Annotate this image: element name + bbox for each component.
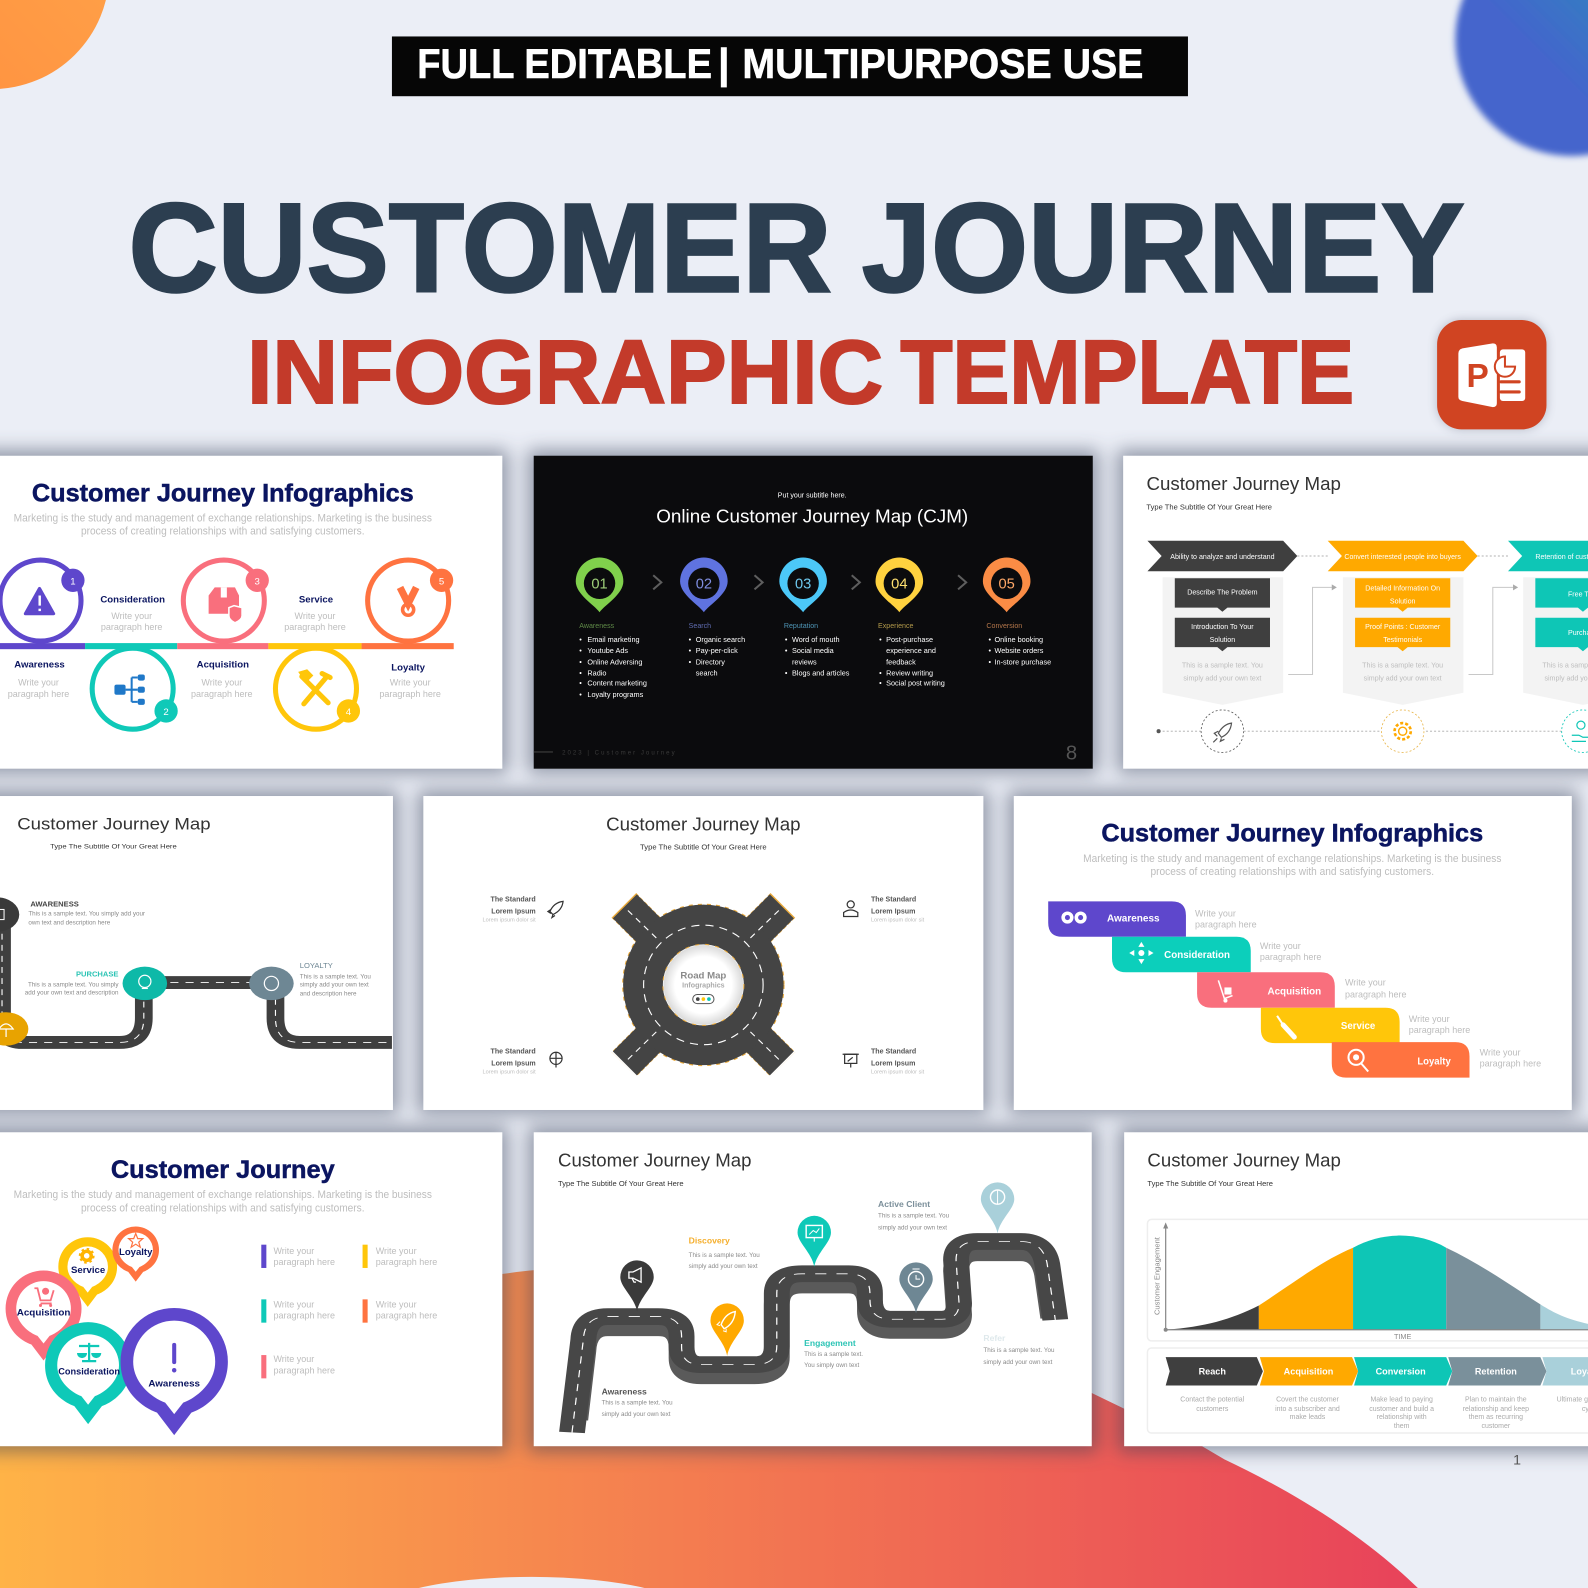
- panel: engagement curve: customer and build a: [1369, 1406, 1434, 1413]
- panel: customer journey infographics circles: 3: [255, 576, 260, 587]
- panel: online customer journey map: Radio: [587, 669, 606, 678]
- step: consideration: Consideration: [1164, 950, 1230, 961]
- panel: road map roundabout: The Standard: [491, 895, 536, 903]
- banner: [392, 36, 1188, 96]
- process arrows: Reach: [1199, 1366, 1226, 1376]
- panel: customer journey staircase: paragraph here: [1195, 920, 1257, 930]
- panel: winding road map: [534, 1132, 1092, 1446]
- panel: road map roundabout: The Standard: [871, 1047, 916, 1055]
- step: acquisition: Acquisition: [1267, 987, 1321, 998]
- road: [2, 912, 392, 1042]
- chevron: teal: [1508, 541, 1588, 571]
- panel: online customer journey map: [534, 456, 1093, 769]
- panel: engagement curve: relationship with: [1377, 1414, 1427, 1421]
- panel: customer journey pins: paragraph here: [273, 1365, 335, 1375]
- panel: customer journey pins: Write your: [273, 1246, 314, 1256]
- panel: engagement curve: Make lead to paying: [1370, 1397, 1433, 1404]
- panel: customer journey staircase: Write your: [1260, 941, 1301, 951]
- panel: customer journey map chevrons: Convert interested people into buyers: [1344, 553, 1461, 561]
- panel: customer journey pins: paragraph here: [273, 1257, 335, 1267]
- panel: winding road map: This is a sample text. You: [689, 1252, 760, 1259]
- panel: road map roundabout: Lorem Ipsum: [491, 1059, 536, 1067]
- pin: service: [58, 1237, 117, 1307]
- pin: acquisition: Acquisition: [17, 1308, 71, 1319]
- panel: online customer journey map: •: [579, 690, 582, 699]
- panel: customer journey staircase: Customer Journey Infographics: [1101, 820, 1483, 848]
- panel: engagement curve: Type The Subtitle Of Your Great Here: [1147, 1180, 1273, 1188]
- step: service: [1261, 1008, 1400, 1043]
- milestone nodes: [0, 897, 294, 1046]
- panel: winding road map: Active Client: [878, 1199, 930, 1209]
- panel: road with milestones: own text and description here: [28, 920, 111, 927]
- panel: road with milestones: [0, 796, 393, 1110]
- panel: engagement curve: make leads: [1290, 1414, 1326, 1421]
- pin: awareness: [121, 1308, 228, 1435]
- panel: winding road map: Discovery: [689, 1236, 730, 1246]
- panel: road map roundabout: The Standard: [491, 1047, 536, 1055]
- icon: powerpoint: P: [1466, 358, 1489, 395]
- pins: 02: [696, 576, 712, 592]
- icon: tools: [300, 670, 330, 704]
- road: [572, 1242, 1055, 1432]
- panel: road map roundabout: Lorem Ipsum: [871, 1059, 915, 1067]
- panel: customer journey infographics circles: Write your: [18, 678, 59, 688]
- panel: online customer journey map: reviews: [792, 657, 817, 666]
- title: customer journey: JOURNEY: [862, 177, 1464, 319]
- panel: online customer journey map: Loyalty programs: [587, 690, 644, 699]
- panel: online customer journey map: •: [785, 646, 788, 655]
- panel: customer journey map chevrons: This is a sample text. You: [1182, 661, 1263, 669]
- panel: road with milestones: Customer Journey Map: [17, 814, 211, 833]
- panel: road map roundabout: [423, 796, 983, 1110]
- panel: road map roundabout: Lorem ipsum dolor sit: [483, 1070, 536, 1076]
- pins: [620, 1182, 1014, 1356]
- title: infographic template: [247, 322, 1354, 423]
- panel: customer journey staircase: [1014, 796, 1572, 1110]
- panel: road with milestones: AWARENESS: [30, 899, 79, 908]
- pins: 05: [999, 576, 1015, 592]
- panel: road map roundabout: Road Map: [680, 970, 726, 981]
- panel: customer journey infographics circles: 2: [163, 707, 169, 718]
- panel: winding road map: This is a sample text.: [804, 1351, 863, 1358]
- panel: online customer journey map: •: [579, 635, 582, 644]
- panel: online customer journey map: experience and: [886, 646, 936, 655]
- panel: online customer journey map: 2023 | Customer Journey: [562, 751, 677, 757]
- panel: road map roundabout: Infographics: [682, 981, 725, 989]
- panel: customer journey infographics circles: paragraph here: [101, 622, 162, 632]
- panel: road with milestones: PURCHASE: [76, 969, 118, 978]
- icon: rocket: [548, 901, 563, 918]
- arrows: [653, 575, 966, 589]
- panel: online customer journey map: Pay-per-click: [696, 646, 738, 655]
- panel: winding road map: This is a sample text. You: [602, 1400, 673, 1407]
- pins: 04: [891, 576, 907, 592]
- panel: online customer journey map: Put your subtitle here.: [778, 491, 847, 499]
- process arrows: Acquisition: [1284, 1366, 1333, 1376]
- pin: awareness: Awareness: [148, 1378, 200, 1389]
- panel: online customer journey map: •: [988, 657, 991, 666]
- panel: customer journey map chevrons: simply add your own text: [1183, 675, 1261, 683]
- panel: customer journey map chevrons: Detailed Information On: [1365, 584, 1440, 592]
- panel: customer journey pins: paragraph here: [376, 1257, 437, 1267]
- panel: online customer journey map: Directory: [696, 657, 725, 666]
- panel: engagement curve: customer: [1482, 1423, 1511, 1430]
- pin: consideration: Consideration: [58, 1366, 120, 1376]
- panel: online customer journey map: •: [879, 679, 882, 688]
- panel: online customer journey map: •: [579, 669, 582, 678]
- page number: 1: [1513, 1452, 1521, 1468]
- panel: engagement curve: Plan to maintain the: [1465, 1397, 1527, 1404]
- panel: customer journey map chevrons: This is a sample text. You: [1362, 661, 1443, 669]
- panel: road map roundabout: Lorem Ipsum: [871, 908, 915, 916]
- panel: customer journey infographics circles: paragraph here: [8, 689, 69, 699]
- panel: customer journey infographics circles: [0, 456, 502, 769]
- title: customer journey: CUSTOMER: [129, 177, 831, 319]
- panel: online customer journey map: Website orders: [995, 646, 1044, 655]
- step: awareness: [1048, 901, 1186, 937]
- panel: customer journey staircase: paragraph here: [1345, 990, 1406, 1000]
- panel: customer journey infographics circles: 1: [70, 576, 76, 587]
- panel: customer journey infographics circles: Customer Journey Infographics: [32, 479, 414, 507]
- step: acquisition: [1197, 972, 1335, 1008]
- panel: online customer journey map: Experience: [878, 622, 914, 630]
- panel: winding road map: Awareness: [602, 1387, 647, 1397]
- panel: engagement curve: Customer Journey Map: [1147, 1151, 1341, 1171]
- panel: customer journey infographics circles: paragraph here: [379, 689, 441, 699]
- panel: customer journey pins: Write your: [376, 1246, 417, 1256]
- panel: online customer journey map: •: [579, 679, 582, 688]
- panel: online customer journey map: •: [879, 669, 882, 678]
- icon: package: [209, 587, 242, 623]
- panel: online customer journey map: Youtube Ads: [587, 646, 628, 655]
- panel: customer journey infographics circles: Write your: [390, 678, 431, 688]
- pin: service: Service: [71, 1265, 106, 1276]
- panel: customer journey infographics circles: paragraph here: [284, 622, 346, 632]
- panel: online customer journey map: •: [988, 646, 991, 655]
- panel: customer journey infographics circles: paragraph here: [191, 689, 253, 699]
- panel: online customer journey map: •: [689, 646, 692, 655]
- panel: online customer journey map: Content marketing: [587, 679, 647, 688]
- panel: customer journey staircase: process of creating relationships with and satisfying customers.: [1150, 866, 1434, 878]
- step: loyalty: Loyalty: [1417, 1056, 1451, 1067]
- panel: customer journey staircase: Write your: [1195, 909, 1236, 919]
- panel: customer journey pins: Write your: [376, 1299, 417, 1309]
- panel: road with milestones: This is a sample text. You simply: [28, 981, 119, 988]
- panel: winding road map: Refer: [983, 1333, 1006, 1343]
- panel: road map roundabout: Lorem ipsum dolor sit: [871, 918, 925, 924]
- panel: customer journey pins: paragraph here: [273, 1311, 335, 1321]
- panel: customer journey pins: paragraph here: [376, 1311, 437, 1321]
- panel: engagement curve: them: [1394, 1423, 1410, 1430]
- decoration: bottom gradient wave: [0, 1266, 1418, 1588]
- banner: MULTIPURPOSE USE: [742, 40, 1143, 87]
- panel: online customer journey map: Online Customer Journey Map (CJM): [656, 506, 968, 527]
- icon: medal: [400, 587, 416, 615]
- panel: customer journey infographics circles: 4: [346, 707, 352, 718]
- icon: rocket: [1213, 723, 1232, 742]
- icon: presentation: [843, 1054, 859, 1067]
- panel: online customer journey map: search: [696, 669, 718, 678]
- panel: winding road map: simply add your own text: [689, 1263, 758, 1270]
- bell curve chart: [1153, 1222, 1588, 1341]
- panel: customer journey staircase: Write your: [1409, 1014, 1450, 1024]
- panel: engagement curve: into a subscriber and: [1275, 1406, 1340, 1413]
- panel: customer journey pins: process of creating relationships with and satisfying customers.: [81, 1202, 365, 1214]
- panel: online customer journey map: Search: [689, 622, 711, 630]
- panel: engagement curve: customers: [1196, 1406, 1229, 1413]
- panel: road map roundabout: Lorem Ipsum: [491, 908, 536, 916]
- panel: winding road map: simply add your own text: [602, 1411, 671, 1418]
- panel: customer journey infographics circles: Service: [299, 595, 334, 606]
- panel: customer journey map chevrons: Introduction To Your: [1191, 623, 1254, 631]
- panel: online customer journey map: •: [785, 669, 788, 678]
- icon: powerpoint: [1437, 320, 1546, 429]
- pin: loyalty: [112, 1226, 159, 1282]
- chevron: orange: [1328, 541, 1478, 571]
- panel: engagement curve: Contact the potential: [1180, 1397, 1245, 1404]
- panel: road map roundabout: The Standard: [871, 895, 916, 903]
- step: consideration: [1112, 937, 1251, 972]
- banner: |: [718, 40, 730, 87]
- panel: customer journey pins: Write your: [273, 1299, 314, 1309]
- panel: online customer journey map: •: [579, 657, 582, 666]
- icon: hand with coin: [1572, 721, 1588, 741]
- panel: online customer journey map: Social media: [792, 646, 835, 655]
- panel: customer journey map chevrons: Customer Journey Map: [1146, 474, 1341, 494]
- icon: person: [844, 901, 858, 917]
- icon: gear: [1395, 723, 1411, 739]
- step: service: Service: [1341, 1021, 1376, 1032]
- icon: warning triangle: [25, 588, 54, 614]
- panel: road with milestones: add your own text and description: [25, 990, 119, 997]
- panel: online customer journey map: •: [879, 635, 882, 644]
- panel: customer journey map chevrons: Proof Points : Customer: [1365, 623, 1441, 631]
- panel: road map roundabout: Lorem ipsum dolor sit: [871, 1070, 925, 1076]
- step: awareness: Awareness: [1107, 914, 1160, 925]
- panel: customer journey infographics circles: Write your: [201, 678, 242, 688]
- panel: customer journey staircase: paragraph here: [1480, 1058, 1541, 1068]
- panel: road with milestones: This is a sample text. You: [300, 973, 371, 980]
- process arrows: Retention: [1475, 1366, 1517, 1376]
- panel: online customer journey map: Word of mouth: [792, 635, 840, 644]
- decoration: orange corner circle: [0, 0, 109, 89]
- chevron: dark: [1147, 541, 1297, 571]
- panel: customer journey infographics circles: Write your: [111, 611, 152, 621]
- panel: customer journey pins: Customer Journey: [111, 1156, 335, 1184]
- panel: winding road map: Engagement: [804, 1338, 856, 1348]
- panel: customer journey pins: Marketing is the study and management of exchange relationships. Marketing is the business: [14, 1189, 432, 1201]
- pins: [576, 558, 1030, 612]
- panel: customer journey staircase: Marketing is the study and management of exchange relationships. Marketing is the business: [1083, 853, 1501, 865]
- panel: road with milestones: and description here: [300, 991, 357, 998]
- panel: online customer journey map: Post-purchase: [886, 635, 933, 644]
- panel: customer journey staircase: paragraph here: [1409, 1025, 1470, 1035]
- panel: online customer journey map: 8: [1066, 743, 1077, 765]
- panel: customer journey pins: Write your: [273, 1354, 314, 1364]
- panel: customer journey map chevrons: Ability to analyze and understand: [1170, 553, 1275, 561]
- roundabout: [623, 904, 784, 1065]
- panel: online customer journey map: In-store purchase: [995, 657, 1051, 666]
- panel: customer journey infographics circles: Marketing is the study and management of exchange relationships. Marketing is the business: [14, 513, 432, 525]
- panel: engagement curve: Covert the customer: [1276, 1397, 1340, 1404]
- panel: customer journey staircase: Write your: [1345, 977, 1386, 987]
- panel: online customer journey map: •: [988, 635, 991, 644]
- panel: customer journey infographics circles: Awareness: [14, 659, 65, 670]
- panel: online customer journey map: Email marketing: [587, 635, 640, 644]
- panel: road with milestones: Type The Subtitle Of Your Great Here: [50, 844, 177, 851]
- panel: customer journey map chevrons: Describe The Problem: [1187, 588, 1258, 596]
- bell curve chart: Customer Engagement: [1153, 1236, 1162, 1315]
- panel: online customer journey map: •: [689, 657, 692, 666]
- decoration: blue blurred corner circle: [1455, 0, 1588, 156]
- title: infographic template: INFOGRAPHIC: [247, 322, 883, 423]
- panel: customer journey map chevrons: Solution: [1210, 636, 1235, 644]
- panel: customer journey map chevrons: Type The Subtitle Of Your Great Here: [1146, 503, 1272, 511]
- panel: customer journey pins: [0, 1132, 502, 1446]
- process arrows: [1166, 1357, 1588, 1385]
- title: customer journey: [129, 177, 1464, 319]
- title: infographic template: TEMPLATE: [900, 322, 1354, 423]
- panel: winding road map: This is a sample text. You: [983, 1347, 1055, 1354]
- panel: customer journey map chevrons: simply add your own text: [1364, 675, 1442, 683]
- panel: online customer journey map: Online booking: [995, 635, 1043, 644]
- icon: traffic light: [693, 995, 714, 1004]
- pin: consideration: [45, 1322, 131, 1424]
- panel: online customer journey map: •: [689, 635, 692, 644]
- process arrows: Conversion: [1376, 1366, 1426, 1376]
- pin: acquisition: [6, 1271, 82, 1361]
- panel: online customer journey map: Organic search: [696, 635, 745, 644]
- panel: winding road map: simply add your own text: [983, 1359, 1053, 1366]
- panel: online customer journey map: Online Adversing: [587, 657, 642, 666]
- panel: online customer journey map: Review writing: [886, 669, 933, 678]
- panel: customer journey infographics circles: Loyalty: [391, 662, 426, 673]
- panel: online customer journey map: Awareness: [579, 622, 615, 630]
- panel: online customer journey map: Social post writing: [886, 679, 945, 688]
- panel: customer journey infographics circles: Consideration: [100, 595, 165, 606]
- panel: engagement curve: relationship and keep: [1463, 1406, 1529, 1413]
- panel: customer journey map chevrons: Testimonials: [1383, 636, 1423, 644]
- panel: customer journey infographics circles: Write your: [295, 611, 335, 621]
- panel: online customer journey map: Reputation: [784, 622, 818, 630]
- panel: winding road map: simply add your own text: [878, 1224, 947, 1231]
- panel: online customer journey map: •: [785, 635, 788, 644]
- panel: road with milestones: simply add your own text: [300, 981, 369, 988]
- pins: 03: [795, 576, 811, 592]
- panel: winding road map: You simply own text: [804, 1362, 860, 1369]
- step: loyalty: [1332, 1042, 1470, 1078]
- panel: winding road map: This is a sample text. You: [878, 1212, 950, 1219]
- panel: customer journey staircase: Write your: [1480, 1047, 1520, 1057]
- panel: online customer journey map: feedback: [886, 657, 916, 666]
- panel: online customer journey map: Blogs and articles: [792, 669, 850, 678]
- panel: online customer journey map: •: [579, 646, 582, 655]
- panel: engagement curve: [1124, 1132, 1588, 1446]
- panel: customer journey staircase: paragraph here: [1260, 952, 1321, 962]
- panel: road map roundabout: Customer Journey Map: [606, 814, 801, 834]
- panel: winding road map: Customer Journey Map: [558, 1151, 751, 1171]
- panel: road map roundabout: Lorem ipsum dolor sit: [483, 918, 536, 924]
- decoration: bottom cut-out ellipse: [370, 1577, 694, 1588]
- panel: customer journey infographics circles: process of creating relationships with and satisfying customers.: [81, 526, 365, 538]
- panel: online customer journey map: Conversion: [986, 622, 1022, 630]
- panel: customer journey infographics circles: 5: [439, 576, 444, 587]
- pin: loyalty: Loyalty: [119, 1247, 153, 1258]
- panel: road with milestones: This is a sample text. You simply add your: [28, 911, 145, 918]
- panel: engagement curve: them as recurring: [1469, 1414, 1523, 1421]
- banner: FULL EDITABLE: [417, 40, 712, 87]
- bell curve chart: TIME: [1394, 1332, 1411, 1341]
- panel: road map roundabout: Type The Subtitle Of Your Great Here: [640, 844, 767, 852]
- panel: winding road map: Type The Subtitle Of Your Great Here: [558, 1180, 684, 1188]
- panel: customer journey infographics circles: Acquisition: [197, 659, 249, 670]
- pins: 01: [591, 576, 608, 592]
- icon: network: [114, 674, 145, 705]
- icon: brain: [550, 1052, 562, 1067]
- panel: customer journey map chevrons: [1123, 456, 1588, 769]
- panel: customer journey map chevrons: Solution: [1390, 598, 1416, 606]
- panel: road with milestones: LOYALTY: [300, 961, 333, 970]
